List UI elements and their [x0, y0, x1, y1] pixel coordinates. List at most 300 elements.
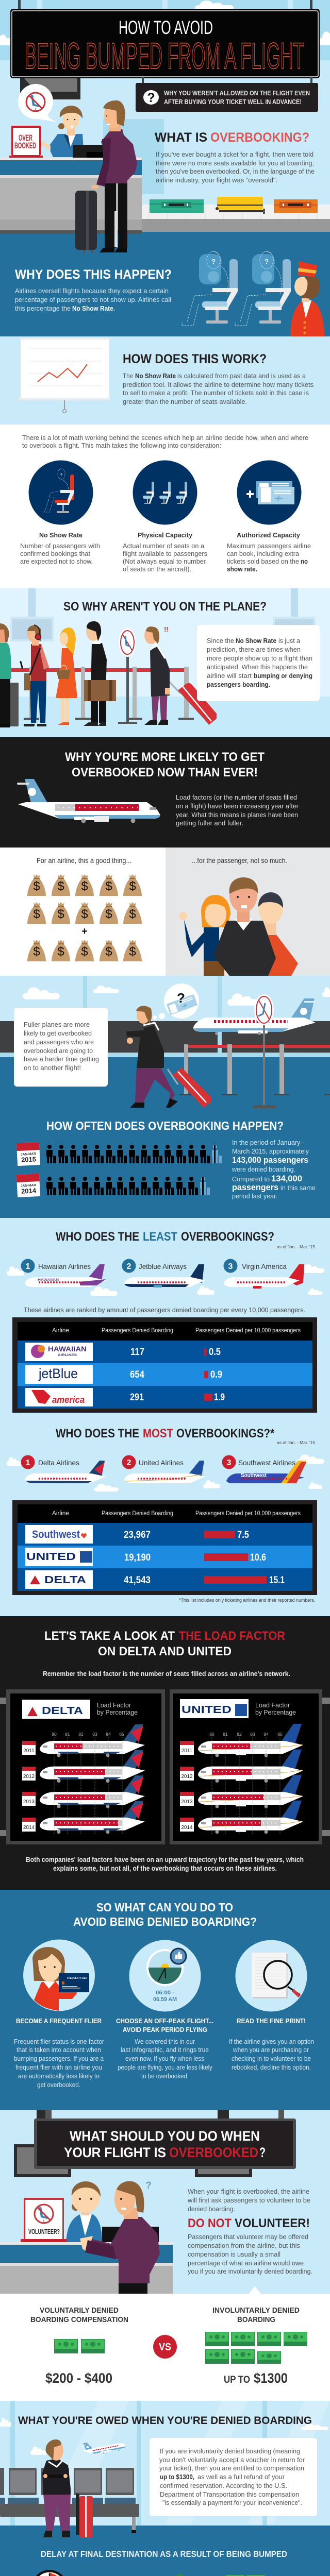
- text: no show rate explanation: The: [123, 372, 133, 380]
- text: compensation warning: Passengers that volunteer may be offered: [188, 2233, 308, 2241]
- label: authorized capacity: show rate.: [227, 565, 257, 573]
- column: voluntary: BOARDING COMPENSATION: [30, 2315, 128, 2324]
- chart: United load factor: 85: [277, 1732, 283, 1737]
- icon grid: money bags: $: [57, 945, 64, 959]
- values: 0.9: [210, 1369, 222, 1380]
- person: man with briefcase: [84, 621, 116, 726]
- callout: entitled to compensation: as well as a full refund of your: [197, 2473, 285, 2481]
- icon: frequent flier: FREQUENT FLIER: [67, 1977, 87, 1980]
- heading: SO WHAT CAN YOU DO TO: [96, 1901, 233, 1914]
- text: math intro: to overbook a flight. This math takes the following into consideration:: [22, 442, 221, 449]
- chart: United load factor: 80: [209, 1732, 214, 1737]
- clerk: [40, 106, 105, 158]
- row 2013: [22, 1775, 145, 1808]
- tip: fine print: rebooked, decline this option.: [232, 2064, 311, 2071]
- heading: most: WHO DOES THE: [56, 1427, 139, 1440]
- text: compensation warning: [188, 2233, 312, 2275]
- panel: good for airline: [0, 848, 166, 976]
- chart: Delta load factor: 83: [92, 1732, 97, 1737]
- tip: frequent flier: frequent flier with an airline you: [15, 2064, 102, 2071]
- title board: [10, 9, 320, 78]
- icon: yellow suitcase: [216, 197, 265, 214]
- wall screen: [20, 77, 80, 99]
- chart: United load factor: 82: [237, 1732, 242, 1737]
- callout: entitled to compensation: "is essentially a payment for your inconvenience".: [162, 2499, 302, 2506]
- illustration: empty seats: [182, 251, 291, 326]
- note: as of Jan. - Mar. '15: [277, 1440, 315, 1445]
- icon: authorized capacity: [237, 461, 301, 524]
- icon grid: money bags: $: [105, 907, 112, 921]
- row 2013: 2013: [181, 1799, 193, 1805]
- tip: fine print: checking in to volunteer to be: [232, 2055, 311, 2062]
- title line 1: HOW TO AVOID: [119, 17, 213, 38]
- icon grid: money bags: +: [81, 926, 88, 937]
- icon grid: money bags: $: [81, 945, 88, 959]
- callout: fuller planes: overbooked are going to: [24, 1047, 93, 1055]
- row 2011: [180, 1724, 303, 1757]
- label: authorized capacity: Maximum passengers airline: [227, 542, 311, 550]
- man asking: [80, 2180, 160, 2294]
- callout: entitled to compensation: If you are involuntarily denied boarding (meaning: [160, 2447, 300, 2455]
- label: no show rate: No Show Rate: [39, 531, 82, 539]
- tip: frequent flier: are automatically less likely to: [18, 2073, 100, 2080]
- heading: do not volunteer: [188, 2216, 310, 2230]
- tip: off-peak: [116, 2017, 213, 2080]
- icon: read the fine print: [235, 1940, 307, 2011]
- text: overbooking definition: there were no more seats available for you at boarding,: [156, 159, 314, 167]
- panel: fuller planes: [0, 976, 330, 1218]
- label: authorized capacity: [227, 531, 311, 573]
- rank 1: Delta: Delta Airlines: [38, 1459, 79, 1467]
- person: teal shirt: [0, 623, 19, 727]
- callout: entitled to compensation: Department of Transportation this compensation: [160, 2490, 299, 2498]
- heading: delay: DELAY AT FINAL DESTINATION AS A RESULT OF BEING BUMPED: [41, 2549, 287, 2559]
- icon: physical capacity: [133, 461, 197, 524]
- tip: fine print: when you are purchasing or: [233, 2046, 309, 2054]
- label: no show rate: Number of passengers with: [20, 542, 100, 550]
- tip: frequent flier: Frequent flier status is one factor: [14, 2038, 104, 2045]
- values: 19,190: [124, 1552, 151, 1563]
- text: compensation warning: compensation from the airline, but this: [188, 2242, 300, 2249]
- row 2013: 2013: [23, 1799, 35, 1805]
- values: 654: [130, 1369, 144, 1380]
- table: most overbookings: [12, 1500, 317, 1595]
- icon: question mark: [143, 90, 159, 105]
- chart: United load factor: 81: [223, 1732, 228, 1737]
- rank 3: Southwest: 3: [227, 1459, 232, 1467]
- illustration: airport bench: [0, 2468, 139, 2533]
- heading: how often: HOW OFTEN DOES OVERBOOKING HAPPEN?: [46, 1119, 284, 1132]
- text: overbooking definition: If you've ever bought a ticket for a flight, then were told: [156, 150, 314, 158]
- calendar: 2014: 2014: [21, 1187, 37, 1195]
- tip: off-peak: to be overbooked.: [141, 2073, 189, 2080]
- panel: load factor: [0, 1616, 330, 1890]
- heading: OVERBOOKED NOW THAN EVER!: [72, 766, 258, 779]
- heading: what is overbooking: WHAT IS: [155, 130, 207, 145]
- heading: least: [56, 1230, 274, 1244]
- flight attendant: [290, 261, 324, 336]
- label: physical capacity: [123, 531, 207, 573]
- heading: least: WHO DOES THE: [56, 1230, 139, 1244]
- chart: Delta load factor: by Percentage: [97, 1708, 138, 1716]
- table: least overbookings: [12, 1317, 317, 1413]
- values: 10.6: [250, 1552, 266, 1563]
- column: involuntary: $1300: [254, 2370, 288, 2386]
- rank 1: Delta: 1: [26, 1459, 30, 1467]
- subtitle board: [136, 77, 318, 112]
- chart: Delta load factor: 81: [65, 1732, 70, 1737]
- clerk: [66, 2181, 159, 2242]
- text: no show rate explanation: prediction tool. It allows the airline to determine how many tickets: [123, 381, 314, 388]
- tip: frequent flier: bumping passengers. If you are a: [14, 2055, 104, 2062]
- icon: off-peak clock: 06.59 AM: [153, 1996, 177, 2003]
- chart: United load factor: by Percentage: [255, 1708, 296, 1716]
- callout: no show rate is a prediction: airline will start: [207, 672, 252, 680]
- queue barrier: [11, 667, 194, 720]
- panel: more likely to get overbooked: [0, 737, 330, 848]
- rank 2: JetBlue: 2: [127, 1262, 131, 1271]
- values: 41,543: [124, 1575, 151, 1586]
- text: trajectory: explains some, but not all, of the overbooking that occurs on these airlines.: [53, 1865, 277, 1872]
- text: why does this happen: percentage of passengers to not show up. Airlines call: [15, 296, 171, 303]
- column: involuntary: UP TO: [224, 2375, 250, 2385]
- row 2014: 2014: [23, 1825, 35, 1831]
- label: authorized capacity: can book, including extra: [227, 550, 300, 557]
- text: denied boarding numbers: 134,000: [271, 1174, 302, 1183]
- tip: off-peak: CHOOSE AN OFF-PEAK FLIGHT...: [116, 2017, 213, 2025]
- wall screens: [14, 2144, 252, 2177]
- icon: off-peak clock: 06:00 -: [156, 1990, 174, 1996]
- tip: off-peak: last infographic, and it rings true: [121, 2046, 209, 2054]
- rank 1: Hawaiian: [21, 1259, 106, 1287]
- text: compensation warning: you if you are involuntarily denied boarding.: [188, 2267, 312, 2275]
- text: no show rate explanation: No Show Rate: [135, 372, 176, 380]
- heading: [73, 1901, 257, 1928]
- callout: fuller planes: Fuller planes are more: [24, 1021, 90, 1028]
- tip: off-peak: AVOID PEAK PERIOD FLYING: [123, 2026, 207, 2033]
- text: trajectory: Both companies' load factors have been on an upward trajectory for the past few years, which: [26, 1856, 304, 1863]
- floor: [0, 232, 330, 336]
- sign: volunteer: VOLUNTEER?: [28, 2227, 60, 2235]
- calendar: 2015: 2015: [21, 1155, 36, 1164]
- icon grid: money bags: $: [105, 879, 112, 893]
- text: no show rate explanation: greater than the number of seats available.: [123, 398, 247, 405]
- column: voluntary: [30, 2306, 128, 2386]
- label: authorized capacity: tickets sold based on the: [227, 557, 299, 565]
- tip: frequent flier: get overbooked.: [37, 2081, 80, 2089]
- illustration: empty seats: ?: [211, 258, 216, 265]
- tip: frequent flier: [14, 2017, 104, 2089]
- chart: Delta load factor: 82: [78, 1732, 84, 1737]
- text: math intro: [22, 434, 308, 449]
- logo: Hawaiian: AIRLINES: [58, 1354, 77, 1357]
- icon grid: money bags: $: [57, 879, 64, 893]
- logo: Delta: [30, 1574, 86, 1586]
- values: 7.5: [237, 1530, 249, 1540]
- text: compensation warning: compensation is usually a small: [188, 2250, 280, 2258]
- text: denied boarding numbers: were denied boarding.: [232, 1165, 295, 1173]
- check-in desk: [0, 2242, 173, 2294]
- label: physical capacity: flight available to passengers: [123, 550, 207, 557]
- callout: no show rate is a prediction: Since the: [207, 637, 234, 645]
- person: woman in orange dress: [56, 628, 77, 725]
- rank 1: Hawaiian: 1: [26, 1262, 30, 1271]
- text: ...for the passenger, not so much.: [192, 857, 287, 865]
- text: For an airline, this a good thing...: [37, 857, 131, 865]
- tip: off-peak: We covered this in our: [135, 2038, 195, 2045]
- thought bubble: ticket: [153, 984, 199, 1020]
- heading board: YOUR FLIGHT IS: [64, 2145, 166, 2160]
- text: overbooking definition: then you've been overbooked. Or, in the language of the: [156, 167, 315, 175]
- calendar: 2014: JAN-MAR: [21, 1183, 36, 1188]
- chart: United load factor: 83: [250, 1732, 255, 1737]
- footnote: *This list includes only ticketing airlines and their reported numbers.: [179, 1598, 315, 1603]
- tip: off-peak: even now. If you fly when less: [125, 2055, 204, 2062]
- badge: vs: [153, 2335, 177, 2359]
- icon grid: money bags: $: [81, 879, 88, 893]
- text: math intro: There is a lot of math working behind the scenes which help an airline decide how, when and where: [22, 434, 308, 442]
- callout: entitled to compensation: [150, 2438, 317, 2516]
- text: compensation warning: percentage of what an airline would owe: [188, 2259, 304, 2267]
- heading: least: LEAST: [143, 1230, 177, 1244]
- man with suitcase: [75, 100, 137, 253]
- rank 2: JetBlue: Jetblue Airways: [139, 1262, 187, 1270]
- panel: what can you do: [0, 1890, 330, 2110]
- callout: no show rate is a prediction: No Show Rate: [236, 637, 276, 645]
- callout: no show rate is a prediction: bumping or denying: [254, 672, 312, 680]
- tip: frequent flier: BECOME A FREQUENT FLIER: [16, 2017, 102, 2025]
- callout: entitled to compensation: confirmed reservation. According to the U.S.: [160, 2482, 287, 2489]
- person: surprised man with red suitcase: !!: [164, 625, 169, 633]
- panel: so why aren't you on the plane: [0, 588, 330, 737]
- text: overbooking definition: [156, 150, 315, 184]
- logo: Southwest: Southwest: [32, 1529, 80, 1540]
- values: 0.5: [209, 1347, 221, 1358]
- row 2012: 2012: [181, 1774, 193, 1780]
- text: denied boarding numbers: Compared to: [232, 1175, 270, 1183]
- row 2014: [22, 1801, 145, 1834]
- subtitle board: AFTER BUYING YOUR TICKET WELL IN ADVANCE!: [164, 98, 302, 106]
- tip: fine print: If the airline gives you an option: [229, 2038, 314, 2045]
- column: involuntary: [205, 2306, 307, 2386]
- callout: no show rate is a prediction: passengers boarding.: [207, 681, 270, 688]
- icon: off-peak clock: [129, 1940, 201, 2011]
- icon grid: money bags: [27, 874, 142, 961]
- logo: Hawaiian: [31, 1345, 87, 1358]
- heading: how does this work: HOW DOES THIS WORK?: [123, 352, 267, 366]
- rank 2: United: 2: [127, 1459, 131, 1467]
- row 2011: 2011: [182, 1748, 193, 1754]
- row: +1 hour: [32, 2571, 273, 2576]
- callout: no show rate is a prediction: is just a: [278, 637, 301, 645]
- column: voluntary: $200 - $400: [45, 2370, 112, 2386]
- table: most overbookings: Airline: [52, 1511, 69, 1517]
- row 2012: [180, 1750, 303, 1783]
- text: denied boarding numbers: passengers: [232, 1182, 278, 1192]
- rank 3: Southwest: [222, 1455, 306, 1483]
- logo: Virgin America: america: [52, 1395, 85, 1405]
- badge: vs: VS: [159, 2342, 171, 2353]
- text: load factors: Load factors (or the number of seats filled: [176, 793, 297, 801]
- callout: fuller planes: likely to get overbooked: [24, 1029, 92, 1037]
- logo: Hawaiian: HAWAIIAN: [48, 1345, 87, 1353]
- panel: how does this work: [0, 336, 330, 425]
- callout: fuller planes: and passengers who are: [24, 1038, 94, 1046]
- person: hurrying man: [126, 1006, 211, 1108]
- sign: no seats: [253, 994, 276, 1108]
- callout: fuller planes: [14, 1008, 108, 1087]
- label: no show rate: [20, 531, 100, 565]
- person: man waiting: [42, 2439, 93, 2537]
- table: least overbookings: Airline: [52, 1328, 69, 1334]
- heading: what is overbooking: [155, 130, 309, 145]
- text: load factors: on a flight) have been increasing year after: [176, 802, 299, 810]
- panel: the math: [0, 425, 330, 588]
- icon: frequent flier: [23, 1939, 95, 2011]
- table: most overbookings: Passengers Denied Boarding: [102, 1511, 173, 1517]
- rank 3: Virgin America: Virgin America: [242, 1262, 287, 1270]
- row 2011: 2011: [23, 1748, 35, 1754]
- heading: [44, 1629, 285, 1658]
- callout: entitled to compensation: you don't voluntarily accept a voucher in return for: [159, 2456, 305, 2464]
- panel: least and most overbookings: [0, 1218, 330, 1616]
- icon: no show rate: [29, 461, 93, 524]
- heading: WHAT YOU'RE OWED WHEN YOU'RE DENIED BOARDING: [18, 2415, 312, 2427]
- text: denied boarding numbers: In the period of January -: [232, 1139, 304, 1146]
- text: overbooking definition: airline industry, your flight was "oversold".: [156, 176, 277, 184]
- heading board: [34, 2110, 296, 2169]
- text: no show rate explanation: to sell to make a profit. The number of tickets sold in this case is: [123, 389, 309, 397]
- logo: Delta: [22, 1700, 90, 1719]
- calendar: 2015: JAN-MAR: [21, 1152, 36, 1157]
- label: no show rate: are expected not to show.: [20, 557, 93, 565]
- tip: frequent flier: that is taken into account when: [16, 2046, 101, 2054]
- row 2014: 2014: [181, 1825, 193, 1831]
- panel: what should you do: [0, 2110, 330, 2294]
- values: 1.9: [214, 1392, 225, 1403]
- heading: WHY YOU'RE MORE LIKELY TO GET: [65, 750, 265, 764]
- thought bubble: ticket: ?: [177, 990, 185, 1006]
- rank 3: Virgin America: 3: [228, 1262, 233, 1271]
- heading board: ?: [259, 2145, 266, 2160]
- callout: fuller planes: have a harder time getting: [24, 1055, 99, 1063]
- tip: off-peak: people are flying, you are less likely: [118, 2064, 213, 2071]
- column: involuntary: INVOLUNTARILY DENIED: [212, 2306, 300, 2315]
- callout: entitled to compensation: up to $1300,: [160, 2473, 194, 2481]
- row 2014: [180, 1801, 303, 1834]
- note: as of Jan. - Mar. '15: [277, 1244, 315, 1249]
- heading: SO WHY AREN'T YOU ON THE PLANE?: [63, 600, 267, 614]
- logo: United: [26, 1551, 92, 1563]
- icon: no show rate: ?: [60, 473, 62, 477]
- callout: no show rate is a prediction: [197, 625, 320, 701]
- chart: Delta load factor: 85: [119, 1732, 124, 1737]
- icon grid: money bags: $: [33, 907, 40, 921]
- sign: overbooked: OVER: [19, 133, 32, 143]
- text: denied boarding numbers: 143,000 passengers: [232, 1155, 308, 1165]
- sign: volunteer: [21, 2198, 67, 2242]
- logo: Virgin America: [31, 1390, 85, 1405]
- barrier: [179, 1044, 330, 1095]
- icon grid: money bags: $: [81, 907, 88, 921]
- sign: overbooked: [9, 126, 43, 158]
- tip: fine print: [229, 2017, 314, 2071]
- text: why does this happen: Airlines oversell flights because they expect a certain: [15, 287, 169, 295]
- row 2012: [22, 1750, 145, 1783]
- values: 291: [130, 1392, 144, 1403]
- text: load factors: [176, 793, 299, 827]
- label: physical capacity: Physical Capacity: [138, 531, 193, 539]
- rank 1: Hawaiian: Hawaiian Airlines: [38, 1262, 91, 1270]
- row 2013: [180, 1775, 303, 1808]
- table: most overbookings: Passengers Denied per 10,000 passengers: [195, 1511, 301, 1517]
- chart: projection screen line chart: [19, 337, 111, 413]
- sign: no seats: [118, 628, 137, 724]
- callout: no show rate is a prediction: anticipated. When this happens the: [207, 663, 308, 671]
- chart: Delta load factor: 84: [106, 1732, 111, 1737]
- heading: most: OVERBOOKINGS?*: [176, 1427, 275, 1440]
- rank 3: Virgin America: [224, 1259, 304, 1289]
- values: [130, 1347, 225, 1403]
- values: 23,967: [124, 1530, 151, 1540]
- text: load factors: getting fuller and fuller.: [176, 819, 243, 827]
- label: physical capacity: (Not always equal to number: [123, 557, 206, 565]
- check-in desk: [0, 158, 142, 234]
- icon: question mark: ?: [147, 91, 155, 105]
- chart: United load factor: [170, 1689, 322, 1844]
- icon grid: money bags: $: [33, 879, 40, 893]
- label: no show rate: confirmed bookings that: [20, 550, 90, 557]
- heading: why does this happen: WHY DOES THIS HAPPEN?: [15, 267, 172, 282]
- row 2012: 2012: [23, 1774, 35, 1780]
- icon grid: money bags: $: [129, 907, 136, 921]
- chart: United load factor: Load Factor: [255, 1701, 290, 1709]
- text: reminder: Remember the load factor is the number of seats filled across an airline's network.: [43, 1670, 290, 1677]
- text: denied boarding numbers: in this same: [280, 1184, 316, 1192]
- rank 3: Southwest: Southwest Airlines: [238, 1459, 295, 1467]
- heading: most: MOST: [143, 1427, 173, 1440]
- heading: least: OVERBOOKINGS?: [181, 1230, 274, 1244]
- text: asked to volunteer: When your flight is overbooked, the airline: [188, 2188, 309, 2195]
- calendar: 2015: [16, 1142, 40, 1166]
- text: load factors: year. What this means is planes have been: [176, 811, 298, 819]
- speech bubble: no seats: [18, 84, 58, 122]
- text: trajectory: [26, 1856, 304, 1872]
- icon grid: money bags: $: [129, 879, 136, 893]
- panel: compensation comparison: [0, 2294, 330, 2401]
- heading: LET'S TAKE A LOOK AT: [44, 1629, 175, 1643]
- heading: do not volunteer: DO NOT: [188, 2216, 232, 2230]
- person: headphones: [20, 625, 49, 726]
- label: authorized capacity: no: [301, 557, 308, 565]
- rank 2: United: United Airlines: [139, 1459, 184, 1467]
- icon grid: money bags: $: [57, 907, 64, 921]
- icon: green suitcase: [150, 199, 204, 213]
- text: asked to volunteer: will first ask passengers to volunteer to be: [187, 2196, 310, 2204]
- icon: orange suitcase: [274, 199, 318, 213]
- pictogram row: 2014: [46, 1177, 210, 1195]
- callout: no show rate is a prediction: more people show up to a flight than: [207, 654, 312, 662]
- heading: ON DELTA AND UNITED: [98, 1645, 232, 1658]
- subtitle board: WHY YOU WEREN'T ALLOWED ON THE FLIGHT EVEN: [164, 90, 310, 97]
- label: authorized capacity: Authorized Capacity: [237, 531, 301, 539]
- heading: most: [56, 1427, 275, 1440]
- logo: United: UNITED: [26, 1551, 76, 1563]
- heading: THE LOAD FACTOR: [179, 1629, 285, 1643]
- text: no show rate explanation: is calculated from past data and is used as a: [177, 372, 306, 380]
- heading: what is overbooking: OVERBOOKING?: [210, 130, 309, 145]
- logo: JetBlue: jetBlue: [38, 1366, 78, 1381]
